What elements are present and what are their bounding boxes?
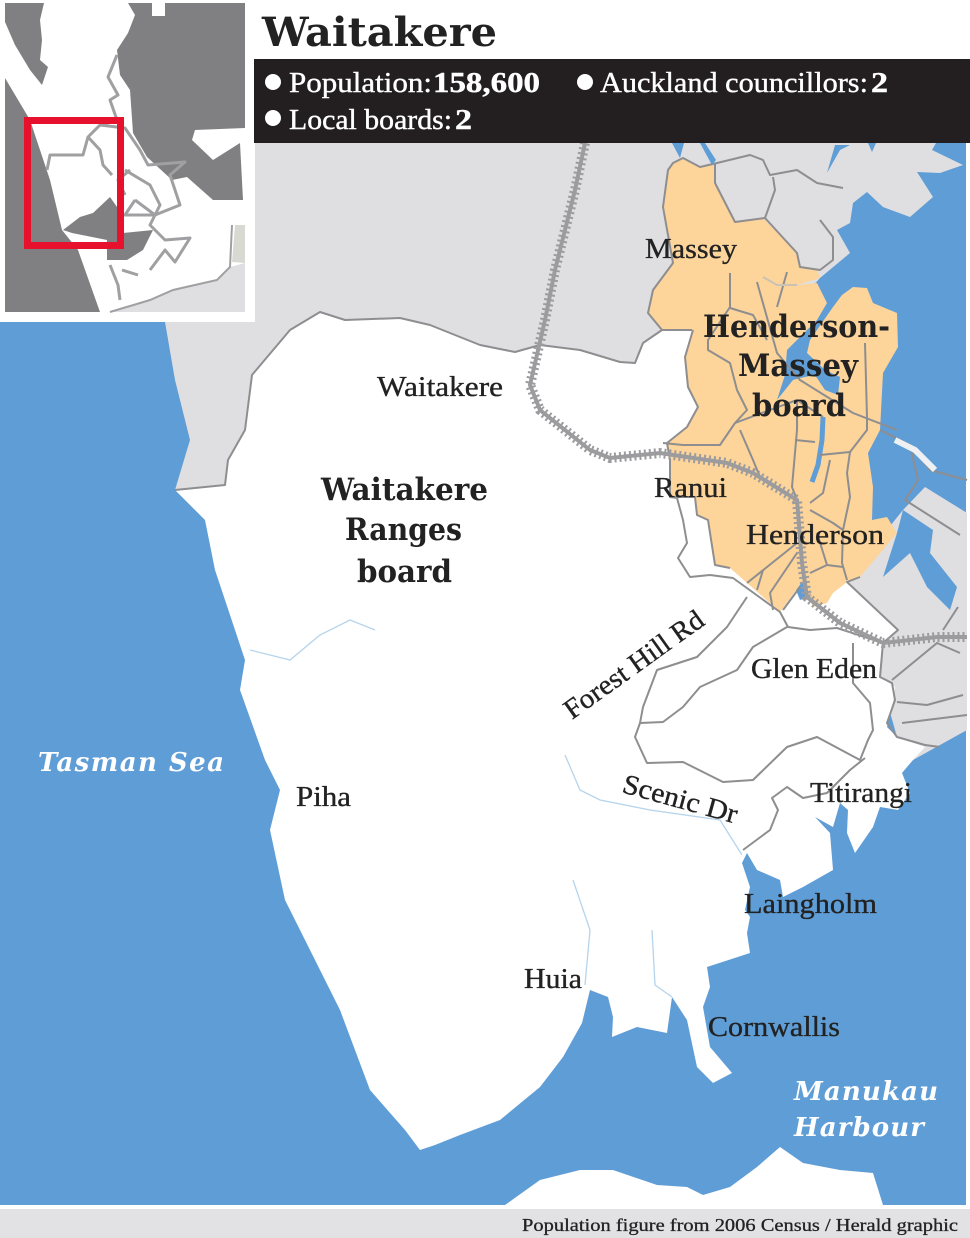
label: Waitakere: Waitakere <box>377 372 503 403</box>
stat: local boards: 2 <box>455 104 472 136</box>
stats bar <box>254 59 970 143</box>
title: Waitakere <box>261 9 497 56</box>
rivers <box>250 143 876 997</box>
label: Henderson: Henderson <box>746 520 884 551</box>
label: Henderson-Massey board <box>703 309 890 424</box>
stat: councillors: 2 <box>871 67 888 99</box>
label: Titirangi: Titirangi <box>810 778 912 809</box>
south shore land <box>505 1147 883 1205</box>
label: Waitakere Ranges board <box>320 472 488 590</box>
railway line <box>530 143 967 643</box>
eastern grey land <box>845 487 967 760</box>
label: Henderson-Massey board: Henderson- <box>703 309 890 345</box>
label: Waitakere Ranges board: board <box>357 554 452 590</box>
label: Waitakere Ranges board: Ranges <box>345 512 462 548</box>
eastern inlet <box>883 510 957 610</box>
inset locator map <box>0 0 255 322</box>
label: Forest Hill Rd: Forest Hill Rd <box>558 604 710 726</box>
boundaries and roads <box>175 155 967 850</box>
stat: population: 158,600 <box>433 67 540 99</box>
source credit: Population figure from 2006 Census / Herald graphic <box>522 1215 958 1235</box>
stat: local boards: Local boards: <box>289 104 452 136</box>
stat: population <box>265 67 540 99</box>
stat: councillors: Auckland councillors: <box>600 67 868 99</box>
label: Huia: Huia <box>524 964 583 995</box>
northern grey land <box>165 143 963 500</box>
label: Manukau Harbour: Harbour <box>793 1113 926 1143</box>
label: Scenic Dr: Scenic Dr <box>619 769 742 830</box>
label: Massey: Massey <box>645 234 737 265</box>
label: Waitakere Ranges board: Waitakere <box>320 472 488 508</box>
waitakere ranges land <box>175 312 925 1150</box>
label: Laingholm: Laingholm <box>744 889 877 920</box>
label: Manukau Harbour: Manukau <box>793 1077 938 1107</box>
label: Piha: Piha <box>296 782 352 813</box>
label: Henderson-Massey board: Massey <box>738 348 859 384</box>
locator rectangle <box>28 120 120 246</box>
label: Tasman Sea: Tasman Sea <box>38 748 224 778</box>
label: Manukau Harbour <box>793 1077 938 1143</box>
label: Glen Eden: Glen Eden <box>751 654 877 685</box>
label: Henderson-Massey board: board <box>752 388 846 424</box>
label: Ranui: Ranui <box>654 473 727 504</box>
footer bar <box>0 1209 970 1238</box>
label: Cornwallis: Cornwallis <box>708 1012 840 1043</box>
map labels <box>38 234 938 1143</box>
panel: henderson-massey board <box>648 158 898 612</box>
stat: population: Population: <box>289 67 432 99</box>
